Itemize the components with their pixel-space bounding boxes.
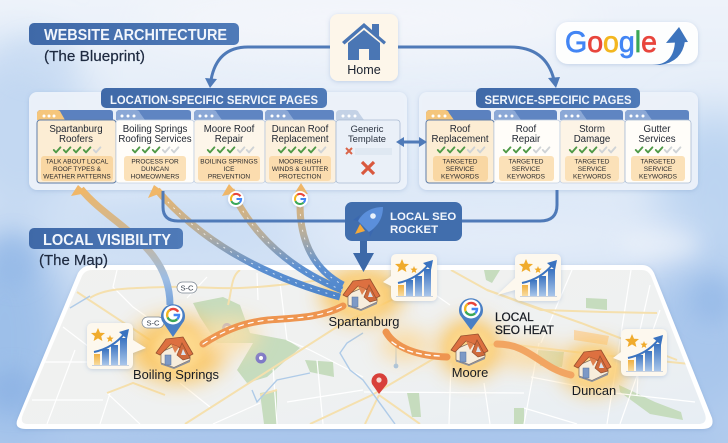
local seo rocket callout <box>345 202 462 241</box>
card: Gutter Services: KEYWORDS <box>639 174 678 180</box>
title: local visibility: LOCAL VISIBILITY <box>43 232 172 249</box>
card: Storm Damage: TARGETED <box>575 158 610 166</box>
card: Roof Replacement: Replacement <box>431 134 489 145</box>
location: Duncan: Duncan <box>572 383 616 398</box>
card: Moore Roof Repair: PREVENTION <box>208 174 250 180</box>
rating chart: Spartanburg <box>383 254 437 301</box>
card: Roof Replacement: SERVICE <box>446 166 475 173</box>
S-C road badges: S-C <box>146 318 160 328</box>
card: Generic Template <box>336 110 400 183</box>
card: Moore Roof Repair: Repair <box>215 134 244 145</box>
google badge on Duncan route <box>292 191 308 207</box>
label: local seo heat: SEO HEAT <box>495 323 554 337</box>
location: Spartanburg: Spartanburg <box>329 314 399 329</box>
rating chart: Duncan <box>613 329 667 376</box>
card: Storm Damage: SERVICE <box>578 166 607 173</box>
card: Moore Roof Repair: BOILING SPRINGS <box>200 158 258 166</box>
location: Moore <box>451 298 488 380</box>
connector: pages to rocket <box>163 190 557 221</box>
map panel <box>0 260 728 430</box>
card: Spartanburg Roofers: ROOF TYPES & <box>53 166 102 173</box>
google pin <box>459 298 483 330</box>
house <box>156 337 193 369</box>
S-C road badges <box>142 282 197 328</box>
location: Boiling Springs <box>133 304 219 382</box>
arrow: double-headed between generic template and service pages <box>396 137 427 147</box>
label: local seo heat: LOCAL <box>495 310 534 324</box>
rating chart: Boiling Springs <box>87 323 146 369</box>
card: Roof Repair: SERVICE <box>512 166 541 173</box>
card: Spartanburg Roofers: Roofers <box>59 134 93 145</box>
icon: home <box>342 23 386 60</box>
route: Spartanburg to Moore card <box>222 184 342 290</box>
card: Gutter Services <box>625 110 691 183</box>
card: Storm Damage: KEYWORDS <box>573 174 612 180</box>
google badge on Moore route <box>228 191 244 207</box>
card: Roof Repair: KEYWORDS <box>507 174 546 180</box>
map: orange heat routes <box>203 306 571 375</box>
card: Roof Replacement: TARGETED <box>443 158 478 166</box>
arrow: home to location pages <box>205 47 332 88</box>
card: Spartanburg Roofers: Spartanburg <box>49 124 103 135</box>
map: purple location dots <box>222 323 266 364</box>
card: Duncan Roof Replacement: Replacement <box>271 134 329 145</box>
map: heat glow <box>128 267 628 394</box>
icon: red map pin <box>372 373 388 394</box>
card: Spartanburg Roofers: TALK ABOUT LOCAL <box>46 158 109 166</box>
card: Roof Replacement: KEYWORDS <box>441 174 480 180</box>
S-C road badges: S-C <box>180 284 194 292</box>
rating chart: Moore <box>497 254 561 301</box>
card: Generic Template: Template <box>348 133 386 144</box>
card: Gutter Services: Gutter <box>644 124 671 135</box>
card: Gutter Services: Services <box>638 134 676 145</box>
location: Spartanburg <box>329 279 399 329</box>
card: Duncan Roof Replacement: MOORE HIGH <box>279 158 322 166</box>
card: Gutter Services: TARGETED <box>641 158 676 166</box>
home box <box>330 14 398 81</box>
subtitle: the map: (The Map) <box>39 252 108 269</box>
card: Spartanburg Roofers: WEATHER PATTERNS <box>43 174 111 180</box>
icon: growth arrow <box>652 27 688 65</box>
google pin <box>161 304 185 337</box>
heading: service-specific <box>476 88 640 108</box>
card: Boiling Springs Roofing Services <box>116 110 194 183</box>
card: Storm Damage: Storm <box>579 124 605 135</box>
card: Boiling Springs Roofing Services: DUNCAN <box>141 166 169 173</box>
house <box>451 334 488 366</box>
panel: location-specific service pages <box>29 88 407 190</box>
google badge: Google <box>565 26 657 59</box>
card: Storm Damage <box>560 110 625 183</box>
card: Boiling Springs Roofing Services: Boiling Springs <box>123 124 187 135</box>
card: Moore Roof Repair <box>194 110 265 183</box>
card: Gutter Services: SERVICE <box>644 166 673 173</box>
heading: service-specific: SERVICE-SPECIFIC PAGES <box>484 94 632 107</box>
card: Roof Repair: Repair <box>512 134 541 145</box>
card: Roof Repair: Roof <box>516 124 537 135</box>
map: river <box>70 296 396 424</box>
icon: rocket <box>353 207 383 237</box>
map: parks <box>193 270 683 424</box>
card: Roof Replacement <box>426 110 494 183</box>
card: Duncan Roof Replacement: Duncan Roof <box>272 124 329 135</box>
title: website architecture: WEBSITE ARCHITECTURE <box>44 27 227 44</box>
heading: location-specific: LOCATION-SPECIFIC SERVICE PAGES <box>110 94 318 107</box>
card: Generic Template: Generic <box>351 123 384 134</box>
location: Boiling Springs: Boiling Springs <box>133 367 219 382</box>
card: Duncan Roof Replacement <box>265 110 336 183</box>
arrow: home to service pages <box>396 47 560 88</box>
map: orange block <box>574 330 609 345</box>
card: Duncan Roof Replacement: WINDS & GUTTER <box>272 166 328 173</box>
route: Boiling Springs to Spartanburg Roofers card <box>71 185 170 305</box>
panel: service-specific pages <box>419 88 698 190</box>
arrow: rocket to Spartanburg <box>353 241 374 272</box>
local seo rocket callout: LOCAL SEO <box>390 211 456 223</box>
card: Boiling Springs Roofing Services: PROCESS FOR <box>131 158 179 166</box>
location: Moore: Moore <box>452 365 488 380</box>
card: Boiling Springs Roofing Services: Roofing Services <box>118 134 192 145</box>
heading: location-specific <box>101 88 327 108</box>
map: roads <box>32 270 695 424</box>
routes: ranking paths from towns to page cards <box>71 183 343 305</box>
card: Duncan Roof Replacement: PROTECTION <box>279 174 322 180</box>
home box: Home <box>347 63 381 77</box>
card: Moore Roof Repair: ICE <box>224 166 235 173</box>
card: Roof Replacement: Roof <box>450 124 471 135</box>
card: Roof Repair: TARGETED <box>509 158 544 166</box>
card: Moore Roof Repair: Moore Roof <box>204 124 255 135</box>
card: Storm Damage: Damage <box>574 134 610 145</box>
card: Spartanburg Roofers <box>37 110 116 183</box>
route: Spartanburg to Duncan card <box>294 183 343 285</box>
location: Duncan <box>572 350 616 398</box>
google badge <box>556 22 698 65</box>
subtitle: the blueprint: (The Blueprint) <box>44 48 145 65</box>
card: Roof Repair <box>494 110 560 183</box>
route: Spartanburg to Boiling Springs card <box>148 185 340 297</box>
local seo rocket callout: ROCKET <box>390 224 438 236</box>
card: Boiling Springs Roofing Services: HOMEOWNERS <box>131 174 180 180</box>
